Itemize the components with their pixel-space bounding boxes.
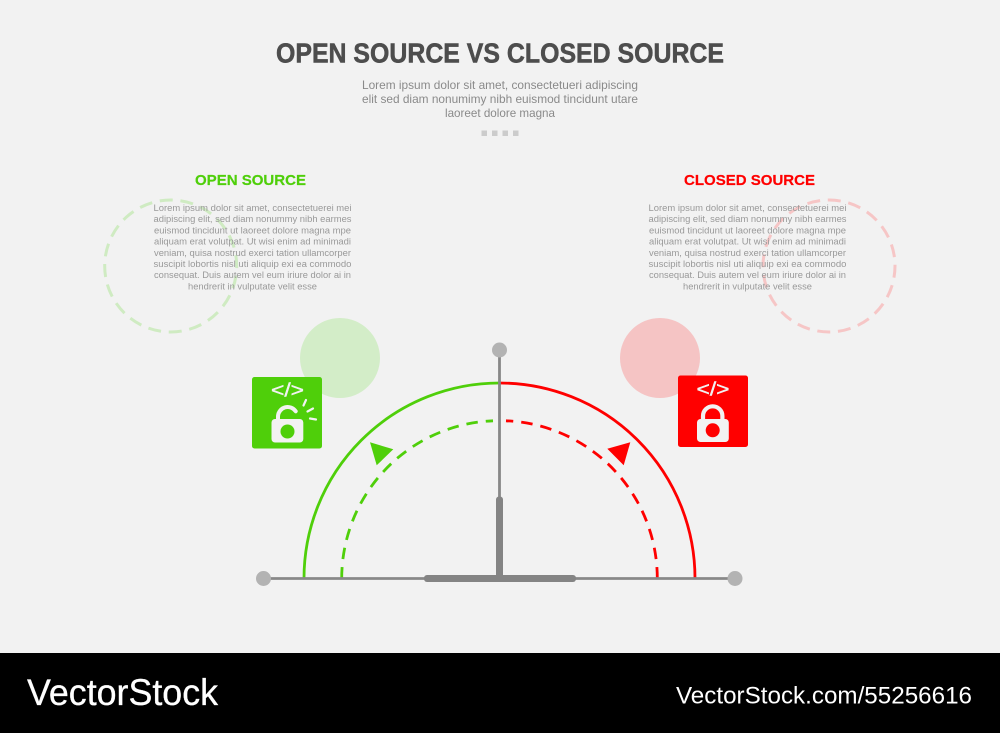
icon: closed lock with code bbox=[678, 376, 748, 447]
divider dots bbox=[482, 130, 518, 136]
footer image id: VectorStock.com/55256616 bbox=[676, 682, 972, 710]
text block: closed source: adipiscing elit, sed diam nonummy nibh earmes bbox=[648, 214, 847, 224]
decorative dashed circle: closed source bbox=[762, 199, 896, 333]
arc: closed source solid bbox=[500, 383, 695, 578]
text block: open source bbox=[154, 203, 352, 291]
text block: closed source: suscipit lobortis nisl uti aliquip exi ea commodo bbox=[648, 259, 846, 269]
arc: open source solid bbox=[304, 383, 500, 578]
heading: open source: OPEN SOURCE bbox=[195, 172, 306, 189]
text block: open source: Lorem ipsum dolor sit amet, consectetuerei mei bbox=[154, 203, 352, 213]
footer bar bbox=[0, 653, 1000, 733]
decorative dashed circle: open source bbox=[96, 191, 246, 341]
text block: open source: aliquam erat volutpat. Ut wisi enim ad minimadi bbox=[154, 237, 351, 247]
text block: closed source bbox=[648, 203, 847, 291]
pale circle: closed source bbox=[620, 318, 700, 398]
text block: closed source: aliquam erat volutpat. Ut wisi enim ad minimadi bbox=[649, 237, 846, 247]
arrow: closed source bbox=[607, 442, 630, 465]
footer wordmark: VectorStock bbox=[27, 672, 218, 713]
icon: closed lock with code: </> bbox=[696, 380, 730, 400]
text block: open source: adipiscing elit, sed diam nonummy nibh earmes bbox=[154, 214, 352, 224]
arc: closed source dashed bbox=[506, 421, 657, 578]
intro text block: laoreet dolore magna bbox=[445, 106, 555, 120]
text block: closed source: hendrerit in vulputate velit esse bbox=[683, 281, 812, 291]
title: OPEN SOURCE VS CLOSED SOURCE bbox=[276, 37, 724, 68]
text block: open source: suscipit lobortis nisl uti aliquip exi ea commodo bbox=[154, 259, 352, 269]
text block: open source: euismod tincidunt ut laoreet dolore magna mpe bbox=[154, 225, 351, 235]
text block: closed source: consequat. Duis autem vel eum iriure dolor ai in bbox=[649, 270, 846, 280]
arrow: open source bbox=[370, 442, 393, 465]
gauge axis bbox=[256, 342, 742, 586]
pale circle: open source bbox=[300, 318, 380, 398]
text block: open source: hendrerit in vulputate velit esse bbox=[188, 281, 317, 291]
icon: open lock with code: </> bbox=[271, 380, 304, 402]
text block: closed source: euismod tincidunt ut laoreet dolore magna mpe bbox=[649, 225, 846, 235]
intro text block: elit sed diam nonumimy nibh euismod tincidunt utare bbox=[362, 92, 638, 106]
arc: open source dashed bbox=[342, 421, 493, 578]
icon: open lock with code bbox=[252, 377, 322, 448]
text block: open source: consequat. Duis autem vel eum iriure dolor ai in bbox=[154, 270, 351, 280]
text block: open source: veniam, quisa nostrud exerci tation ullamcorper bbox=[154, 248, 351, 258]
text block: closed source: Lorem ipsum dolor sit amet, consectetuerei mei bbox=[648, 203, 846, 213]
heading: closed source: CLOSED SOURCE bbox=[684, 172, 815, 189]
intro text block bbox=[362, 78, 638, 120]
intro text block: Lorem ipsum dolor sit amet, consectetueri adipiscing bbox=[362, 78, 638, 92]
text block: closed source: veniam, quisa nostrud exerci tation ullamcorper bbox=[649, 248, 846, 258]
